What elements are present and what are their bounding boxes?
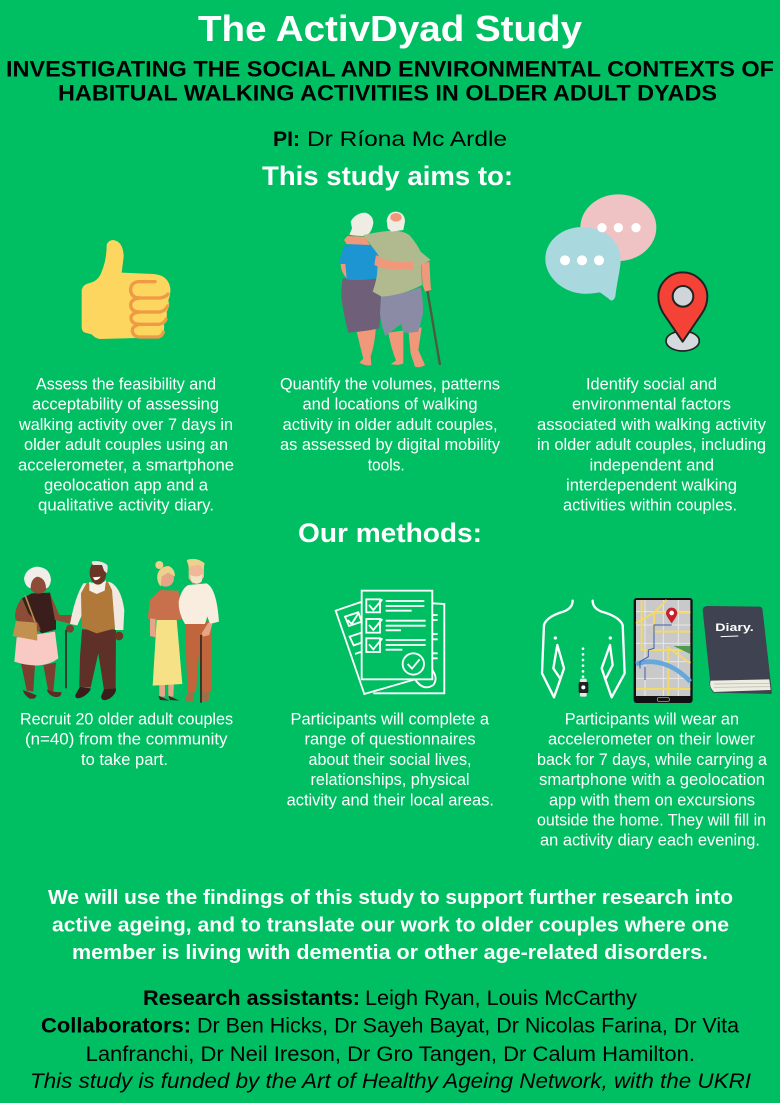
- closing statement: active ageing, and to translate our work to older couples where one: [52, 914, 729, 937]
- aim 2 text: activity in older adult couples,: [283, 416, 498, 434]
- couple 1 woman legs: [21, 663, 56, 692]
- man shirt: [363, 231, 431, 297]
- diary: [703, 606, 772, 694]
- method 3 text: outside the home. They will fill in: [537, 811, 766, 829]
- icon: questionnaires: [336, 591, 444, 694]
- method 2 text: range of questionnaires: [304, 731, 476, 749]
- man arm: [421, 262, 431, 292]
- subtitle: INVESTIGATING THE SOCIAL AND ENVIRONMENTAL CONTEXTS OF: [6, 56, 774, 82]
- principal investigator: PI:: [273, 128, 300, 151]
- couple 1 woman bag: [25, 595, 35, 622]
- subtitle: HABITUAL WALKING ACTIVITIES IN OLDER ADULT DYADS: [58, 80, 717, 106]
- method 2 text: activity and their local areas.: [287, 791, 494, 809]
- method 1 text: Recruit 20 older adult couples: [20, 710, 233, 728]
- aim 2 text: [280, 375, 501, 474]
- aim 3 text: [537, 375, 767, 514]
- collaborators: Dr Ben Hicks, Dr Sayeh Bayat, Dr Nicolas Farina, Dr Vita: [197, 1015, 739, 1038]
- aim 3 text: interdependent walking: [566, 476, 737, 494]
- couple 1 man pants: [79, 629, 116, 690]
- couple 1 man hand and cane: [66, 625, 74, 633]
- couple 2 man: [185, 622, 212, 693]
- method 2 text: about their social lives,: [308, 751, 472, 769]
- aim 3 text: activities within couples.: [563, 496, 737, 514]
- method 1 text: to take part.: [81, 751, 168, 769]
- aim 2 text: Quantify the volumes, patterns: [280, 375, 500, 393]
- couple 1 woman skirt: [14, 632, 58, 665]
- aim 2 text: and locations of walking: [302, 396, 478, 414]
- principal investigator: Dr Ríona Mc Ardle: [307, 128, 507, 151]
- aim 3 text: associated with walking activity: [537, 416, 767, 434]
- couple 1 man head: [90, 561, 106, 585]
- title: The ActivDyad Study: [198, 8, 582, 49]
- closing statement: We will use the findings of this study to support further research into: [48, 886, 733, 909]
- research assistants: Research assistants:: [143, 987, 360, 1010]
- method 3 text: back for 7 days, while carrying a: [537, 751, 768, 769]
- icon: elderly couple walking from behind: [339, 212, 440, 367]
- collaborators: [41, 1015, 739, 1066]
- man legs: [388, 331, 403, 365]
- method 3 text: app with them on excursions: [549, 791, 755, 809]
- accelerometer: [580, 679, 587, 697]
- woman skirt: [341, 276, 382, 333]
- method 3 text: accelerometer on their lower: [548, 731, 756, 749]
- couple 1 man shirt: [70, 582, 124, 630]
- aim 1 text: accelerometer, a smartphone: [18, 456, 234, 474]
- icon: accelerometer on lower back, phone map, diary: Diary.: [715, 622, 754, 634]
- closing statement: member is living with dementia or other age-related disorders.: [72, 941, 708, 964]
- phone: [634, 598, 693, 703]
- aim 2 text: tools.: [368, 456, 405, 474]
- aim 1 text: qualitative activity diary.: [38, 496, 214, 514]
- icon: accelerometer on lower back, phone map, diary: [542, 598, 772, 703]
- aim 1 text: older adult couples using an: [24, 436, 228, 454]
- method 3 text: Participants will wear an: [565, 710, 739, 728]
- research assistants: [143, 987, 638, 1010]
- aim 3 text: in older adult couples, including: [537, 436, 766, 454]
- method 1 text: (n=40) from the community: [25, 731, 228, 749]
- woman hair: [349, 213, 373, 236]
- aim 3 text: Identify social and: [586, 375, 717, 393]
- cane: [427, 290, 440, 365]
- closing statement: [48, 886, 733, 964]
- aim 1 text: geolocation app and a: [44, 476, 209, 494]
- icon: thumbs up: [82, 240, 170, 339]
- method 3 text: smartphone with a geolocation: [539, 771, 765, 789]
- couple 1 woman head: [29, 575, 48, 594]
- woman legs: [356, 326, 376, 365]
- heading: aims: This study aims to:: [262, 161, 513, 191]
- research assistants: Leigh Ryan, Louis McCarthy: [365, 987, 638, 1010]
- funding note: This study is funded by the Art of Healthy Ageing Network, with the UKRI: [30, 1070, 751, 1093]
- method 3 text: [537, 710, 768, 849]
- aim 1 text: Assess the feasibility and: [36, 375, 216, 393]
- collaborators: Collaborators:: [41, 1015, 191, 1038]
- aim 3 text: independent and: [590, 456, 714, 474]
- aim 1 text: [18, 375, 234, 514]
- aim 1 text: walking activity over 7 days in: [18, 416, 233, 434]
- woman top: [339, 244, 383, 280]
- heading: methods: Our methods:: [298, 518, 482, 548]
- aim 1 text: acceptability of assessing: [32, 396, 219, 414]
- icon: two older couples: [13, 559, 219, 703]
- couple 1 woman body: [22, 593, 56, 633]
- method 2 text: relationships, physical: [310, 771, 470, 789]
- subtitle: [6, 56, 774, 106]
- aim 2 text: as assessed by digital mobility: [280, 436, 501, 454]
- back outline: [542, 601, 625, 697]
- method 2 text: [287, 710, 494, 809]
- method 2 text: Participants will complete a: [290, 710, 490, 728]
- man head: [387, 212, 405, 232]
- aim 3 text: environmental factors: [572, 396, 731, 414]
- method 1 text: [20, 710, 233, 769]
- couple 2 woman: [159, 683, 174, 697]
- man shorts: [380, 287, 423, 336]
- collaborators: Lanfranchi, Dr Neil Ireson, Dr Gro Tangen, Dr Calum Hamilton.: [86, 1043, 695, 1066]
- method 3 text: an activity diary each evening.: [540, 831, 760, 849]
- couple 1 man vest: [81, 581, 115, 633]
- icon: speech bubbles and map pin: [545, 194, 707, 351]
